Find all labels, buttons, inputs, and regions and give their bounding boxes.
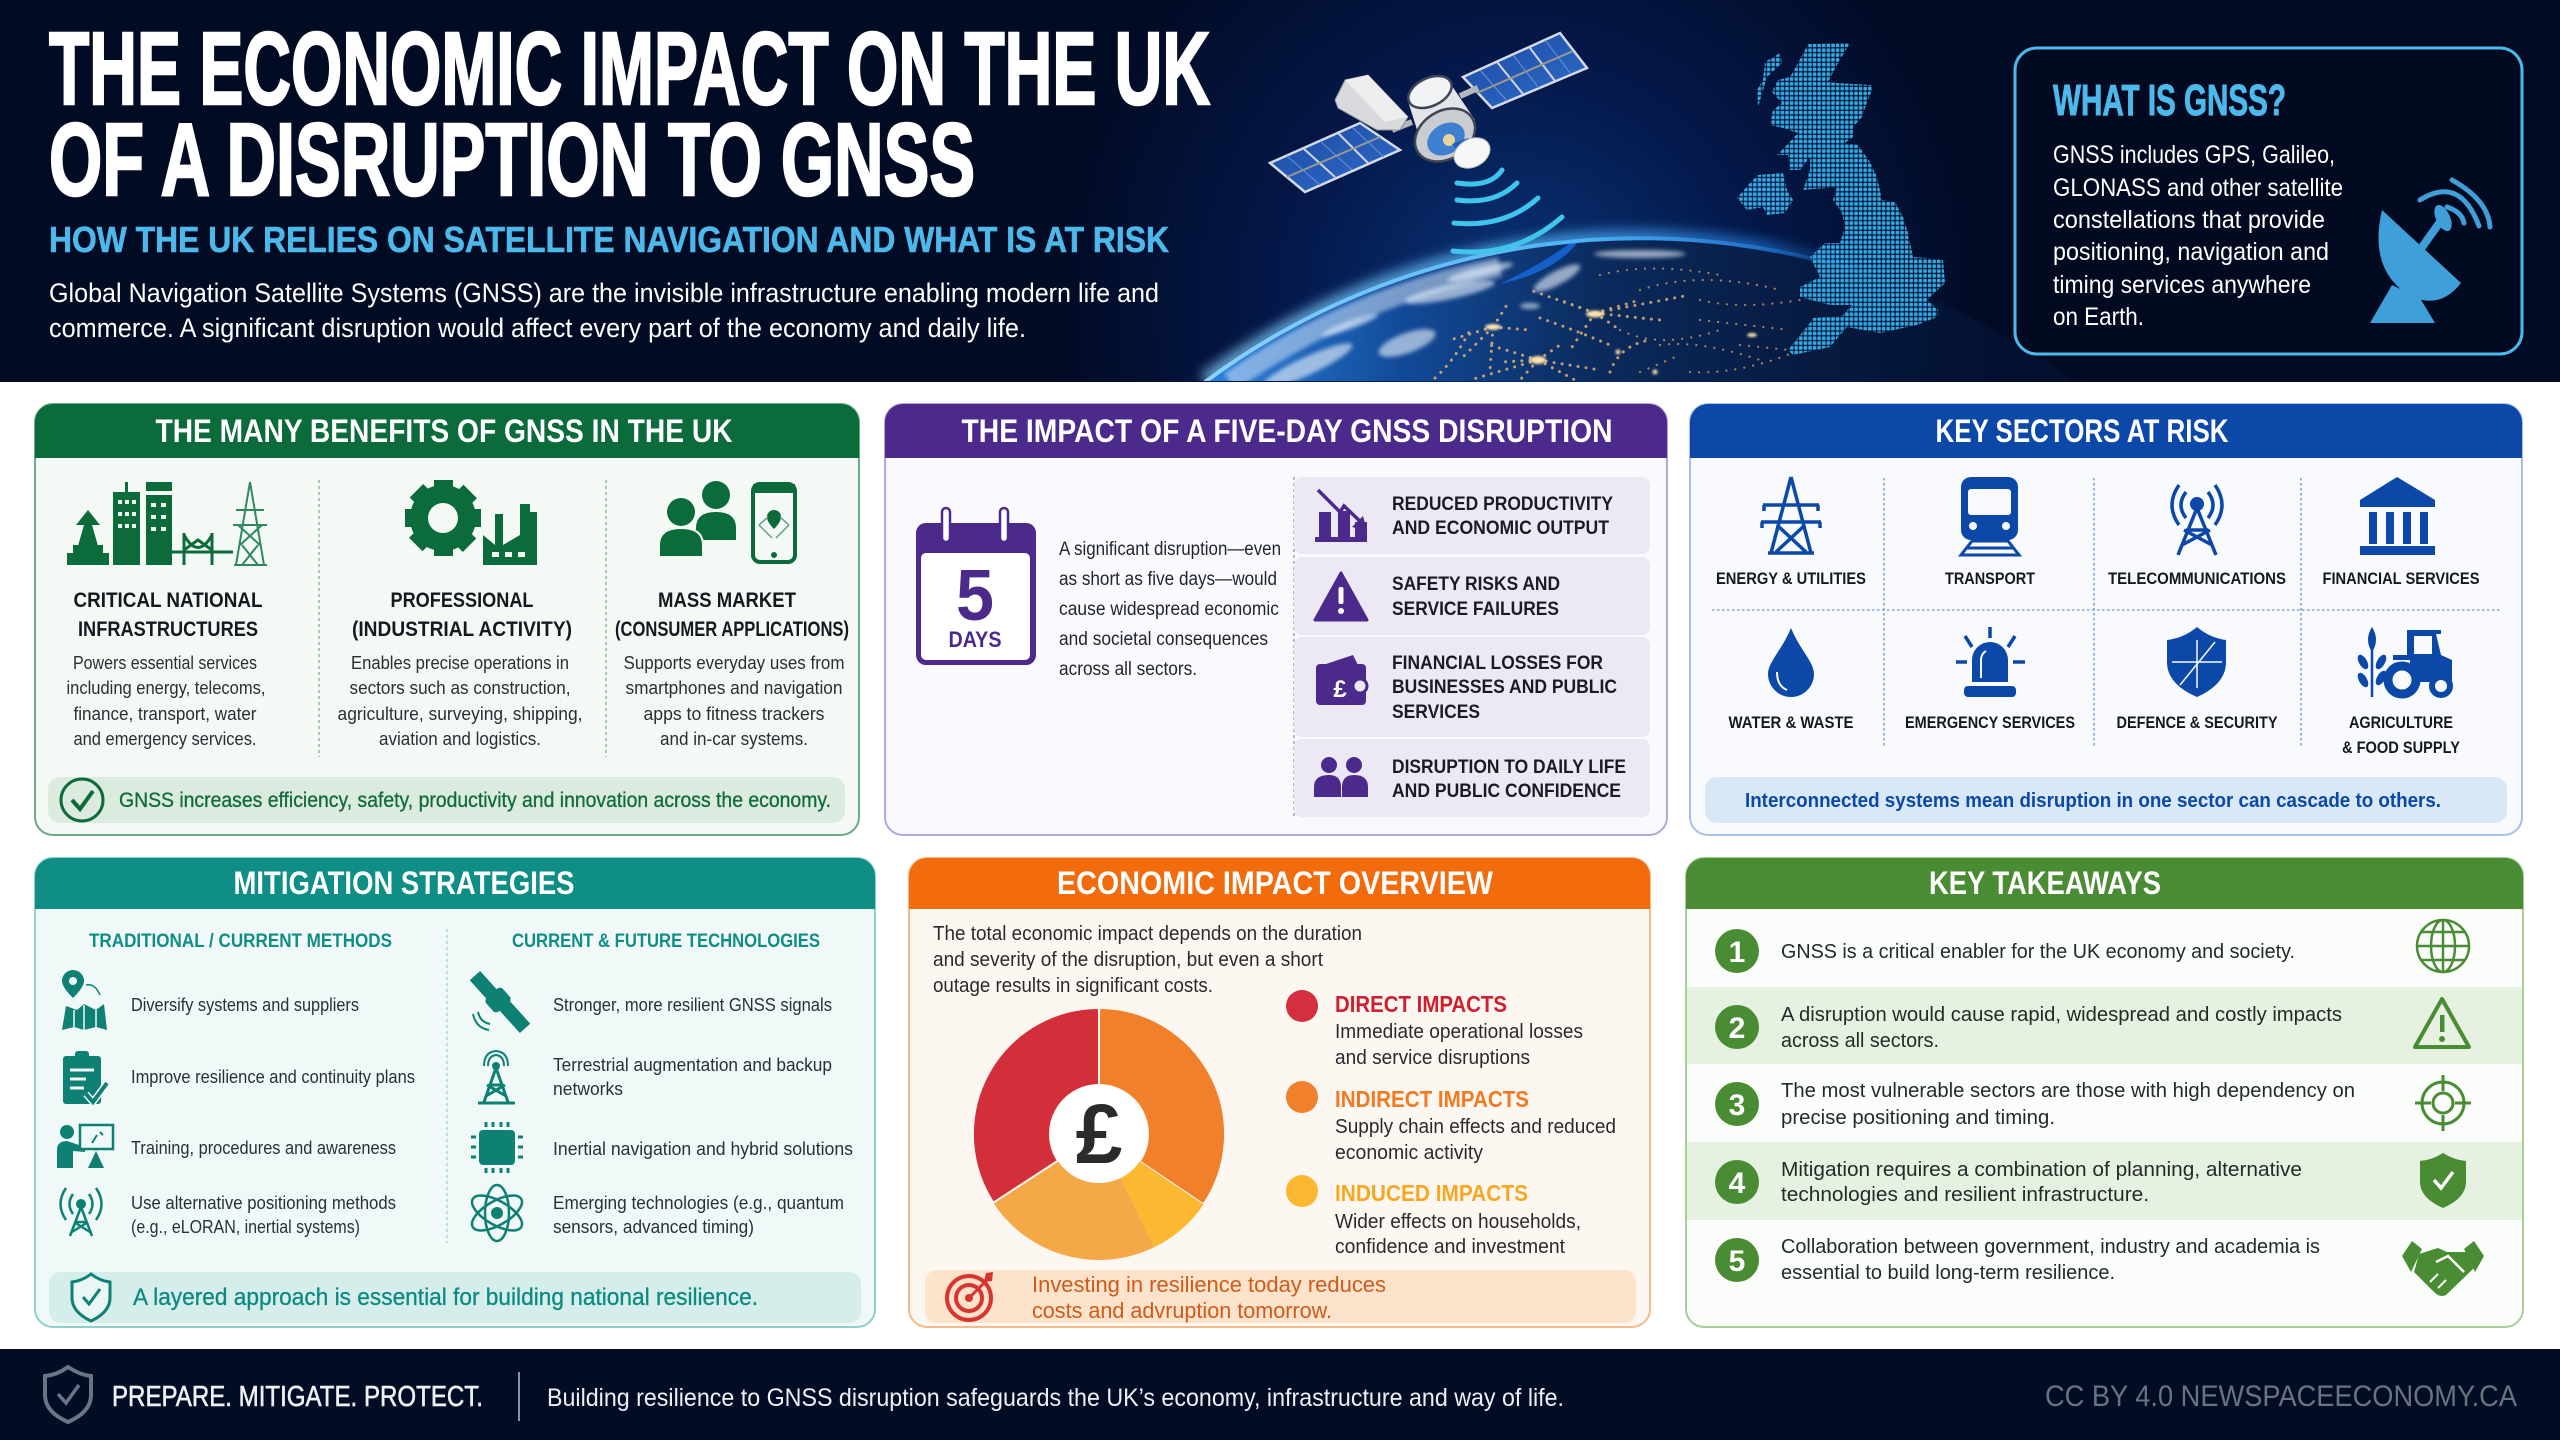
key takeaways header: KEY TAKEAWAYS [1929,865,2161,901]
takeaway 2: 2 [1729,1012,1745,1045]
economic impact description: The total economic impact depends on the duration [933,923,1362,945]
takeaway 3: The most vulnerable sectors are those with high dependency on [1781,1080,2355,1102]
sector: energy [1716,477,1866,588]
column: professional [338,589,582,749]
legend: direct impacts: Immediate operational losses [1335,1021,1583,1043]
what is GNSS text: timing services anywhere [2053,271,2311,299]
item: daily life: DISRUPTION TO DAILY LIFE [1392,757,1626,778]
icon: critical infrastructure [67,482,267,565]
column: critical national infrastructures: including energy, telecoms, [66,678,266,698]
intro paragraph: Global Navigation Satellite Systems (GNSS) are the invisible infrastructure enabling modern life and [49,278,1159,308]
five-day description: as short as five days—would [1059,569,1277,590]
economic impact description [933,923,1362,997]
callout: investing in resilience: costs and advruption tomorrow. [1032,1298,1332,1323]
legend: indirect impacts: INDIRECT IMPACTS [1335,1086,1529,1112]
five-day description: A significant disruption—even [1059,539,1281,560]
callout: layered approach [49,1272,861,1323]
item: alternative positioning: (e.g., eLORAN, inertial systems) [131,1217,360,1237]
sector: defence: DEFENCE & SECURITY [2116,713,2278,732]
five-day description: and societal consequences [1059,629,1268,650]
sector: water: WATER & WASTE [1728,713,1854,732]
panel: benefits of GNSS [35,404,859,835]
item: inertial navigation [471,1122,853,1173]
what is GNSS text [2053,141,2343,331]
economic impact description: and severity of the disruption, but even a short [933,949,1323,971]
takeaway 4: 4 [1729,1167,1746,1200]
takeaway 2 [1715,999,2469,1052]
item: stronger signals [470,971,832,1033]
column: critical national infrastructures: INFRASTRUCTURES [78,618,258,641]
economic impact header [909,858,1650,909]
column: professional: Enables precise operations in [351,653,569,673]
column: critical national infrastructures: Powers essential services [73,653,257,673]
footer message: Building resilience to GNSS disruption safeguards the UK’s economy, infrastructure and way of life. [547,1384,1564,1412]
item: emerging technologies: Emerging technologies (e.g., quantum [553,1193,844,1213]
five-day description: cause widespread economic [1059,599,1279,620]
sector: transport [1945,477,2036,588]
benefits header: THE MANY BENEFITS OF GNSS IN THE UK [156,413,732,449]
sector: agriculture: & FOOD SUPPLY [2342,738,2461,757]
item: terrestrial augmentation [478,1051,832,1103]
panel: key sectors [1690,404,2522,835]
benefits header [35,404,859,458]
takeaway 4: Mitigation requires a combination of planning, alternative [1781,1159,2302,1181]
legend: induced impacts [1286,1175,1581,1258]
sector: water [1728,628,1854,732]
takeaway 5: essential to build long-term resilience. [1781,1262,2115,1284]
item: financial losses: SERVICES [1392,702,1480,723]
column: professional: aviation and logistics. [379,729,541,749]
earth globe [1205,238,2075,395]
item: emerging technologies [467,1185,844,1241]
legend: indirect impacts: Supply chain effects and reduced [1335,1116,1616,1138]
sector: defence [2116,627,2278,732]
item: emerging technologies: sensors, advanced timing) [553,1217,754,1237]
item: daily life [1294,739,1650,817]
takeaway 4: technologies and resilient infrastructure. [1781,1184,2149,1206]
takeaway 3: precise positioning and timing. [1781,1107,2055,1129]
column: mass market: apps to fitness trackers [644,704,824,724]
panel: economic impact overview [909,858,1650,1327]
callout: investing in resilience [925,1270,1636,1323]
sector: transport: TRANSPORT [1945,569,2036,588]
column: critical national infrastructures: and emergency services. [74,729,256,749]
takeaway 5 [1715,1236,2484,1296]
subtitle: HOW THE UK RELIES ON SATELLITE NAVIGATION AND WHAT IS AT RISK [49,219,1169,260]
callout: interconnected systems [1705,777,2507,823]
item: reduced productivity: REDUCED PRODUCTIVITY [1392,494,1613,515]
item: safety risks [1294,557,1650,635]
column: professional: sectors such as construction, [350,678,570,698]
item: safety risks: SAFETY RISKS AND [1392,574,1560,595]
legend: direct impacts: DIRECT IMPACTS [1335,991,1507,1017]
sector: agriculture [2342,627,2461,757]
column: mass market [615,589,849,749]
item: financial losses [1294,637,1650,737]
title [49,11,1210,217]
what is GNSS text: GLONASS and other satellite [2053,174,2343,202]
takeaway 5: Collaboration between government, industry and academia is [1781,1236,2320,1258]
column: professional: (INDUSTRIAL ACTIVITY) [352,618,572,641]
footer band [0,1349,2560,1440]
what is GNSS text: constellations that provide [2053,206,2325,234]
item: inertial navigation: Inertial navigation and hybrid solutions [553,1139,853,1159]
five-day header [885,404,1667,458]
key sectors header: KEY SECTORS AT RISK [1936,413,2228,449]
column: mass market: Supports everyday uses from [624,653,844,673]
economic impact header: ECONOMIC IMPACT OVERVIEW [1057,865,1494,901]
sector: telecommunications: TELECOMMUNICATIONS [2108,569,2286,588]
title: THE ECONOMIC IMPACT ON THE UK [49,11,1210,126]
takeaway 3: 3 [1729,1089,1745,1122]
icon: 5 days calendar [916,508,1036,665]
takeaway 1: GNSS is a critical enabler for the UK economy and society. [1781,941,2295,963]
legend: direct impacts: and service disruptions [1335,1047,1530,1069]
item: diversify: Diversify systems and suppliers [131,995,359,1015]
legend: induced impacts: Wider effects on households, [1335,1211,1581,1233]
intro paragraph [49,278,1159,343]
what is GNSS text: GNSS includes GPS, Galileo, [2053,141,2335,169]
what is GNSS text: positioning, navigation and [2053,238,2329,266]
takeaway 4 [1715,1153,2466,1208]
callout: layered approach: A layered approach is essential for building national resilience. [133,1284,758,1311]
takeaway 1: 1 [1729,936,1745,969]
legend: induced impacts: confidence and investment [1335,1236,1565,1258]
column: critical national infrastructures [66,589,266,749]
item: stronger signals: Stronger, more resilient GNSS signals [553,995,832,1015]
column: professional: agriculture, surveying, shipping, [338,704,582,724]
solar panel right [1463,33,1587,108]
icon: gear and factory [405,480,537,565]
sector: emergency [1905,627,2075,732]
title: OF A DISRUPTION TO GNSS [49,102,975,217]
panel: what is GNSS [2015,48,2522,354]
column: professional: PROFESSIONAL [390,589,534,612]
header background [0,0,2560,382]
key sectors header [1690,404,2522,458]
panel: key takeaways [1686,858,2523,1327]
column: critical national infrastructures: finance, transport, water [74,704,256,724]
future technologies heading: CURRENT & FUTURE TECHNOLOGIES [512,931,820,952]
takeaway 2: across all sectors. [1781,1030,1939,1052]
takeaway 3 [1715,1075,2471,1131]
icon: 5 days calendar: 5 [956,556,994,636]
satellite illustration [1270,33,1587,192]
legend: indirect impacts: economic activity [1335,1142,1483,1164]
item: diversify [62,970,359,1030]
item: daily life: AND PUBLIC CONFIDENCE [1392,781,1621,802]
takeaway 1 [1715,920,2469,973]
callout: investing in resilience: Investing in resilience today reduces [1032,1272,1386,1297]
column: mass market: and in-car systems. [660,729,808,749]
item: reduced productivity [1294,477,1650,554]
what is GNSS heading: WHAT IS GNSS? [2053,76,2286,125]
callout: efficiency: GNSS increases efficiency, safety, productivity and innovation across the economy. [119,789,831,812]
UK dotted map [1737,43,1945,355]
solar panel left [1270,123,1400,192]
callout: efficiency [48,777,845,823]
donut chart: £ [1076,1087,1122,1181]
item: financial losses: BUSINESSES AND PUBLIC [1392,677,1617,698]
panel: five-day disruption [885,404,1667,835]
five-day description [1059,539,1281,680]
item: reduced productivity: AND ECONOMIC OUTPUT [1392,518,1609,539]
icon: people and phone [659,481,795,562]
sector: financial: FINANCIAL SERVICES [2322,569,2480,588]
footer credit: CC BY 4.0 NEWSPACEECONOMY.CA [2045,1380,2517,1413]
sector: financial [2322,477,2480,588]
legend: direct impacts [1286,990,1583,1069]
item: continuity plans: Improve resilience and continuity plans [131,1067,415,1087]
item: training: Training, procedures and awareness [131,1138,396,1158]
footer slogan: PREPARE. MITIGATE. PROTECT. [112,1381,483,1413]
column: mass market: MASS MARKET [658,589,796,612]
legend: induced impacts: INDUCED IMPACTS [1335,1180,1528,1206]
what is GNSS text: on Earth. [2053,303,2144,331]
callout: interconnected systems: Interconnected systems mean disruption in one sector can cascade to others. [1745,790,2441,812]
item: terrestrial augmentation: networks [553,1079,623,1099]
column: critical national infrastructures: CRITICAL NATIONAL [74,589,263,612]
icon: footer shield [45,1367,91,1422]
traditional methods heading: TRADITIONAL / CURRENT METHODS [89,931,392,952]
column: mass market: smartphones and navigation [626,678,842,698]
item: alternative positioning: Use alternative positioning methods [131,1193,396,1213]
sector: telecommunications [2108,485,2286,588]
sector: agriculture: AGRICULTURE [2349,713,2453,732]
legend: indirect impacts [1286,1081,1616,1164]
intro paragraph: commerce. A significant disruption would affect every part of the economy and daily life. [49,313,1026,343]
panel: mitigation strategies [35,858,875,1327]
donut chart [973,1008,1225,1260]
economic impact description: outage results in significant costs. [933,975,1213,997]
icon: satellite dish [2370,180,2490,323]
item: alternative positioning [60,1188,396,1237]
column: mass market: (CONSUMER APPLICATIONS) [615,618,849,641]
mitigation header [35,858,875,909]
signal arcs [1453,170,1562,252]
item: safety risks: SERVICE FAILURES [1392,599,1559,620]
item: continuity plans [63,1051,415,1104]
takeaway 2: A disruption would cause rapid, widespread and costly impacts [1781,1004,2342,1026]
item: financial losses: FINANCIAL LOSSES FOR [1392,653,1603,674]
sector: energy: ENERGY & UTILITIES [1716,569,1866,588]
mitigation header: MITIGATION STRATEGIES [234,865,574,901]
key takeaways header [1686,858,2523,909]
five-day description: across all sectors. [1059,659,1197,680]
item: terrestrial augmentation: Terrestrial augmentation and backup [553,1055,832,1075]
icon: 5 days calendar: DAYS [948,627,1002,652]
five-day header: THE IMPACT OF A FIVE-DAY GNSS DISRUPTION [962,413,1612,449]
takeaway 5: 5 [1729,1245,1745,1278]
item: financial losses: £ [1333,676,1347,703]
sector: emergency: EMERGENCY SERVICES [1905,713,2075,732]
item: training [57,1125,396,1168]
